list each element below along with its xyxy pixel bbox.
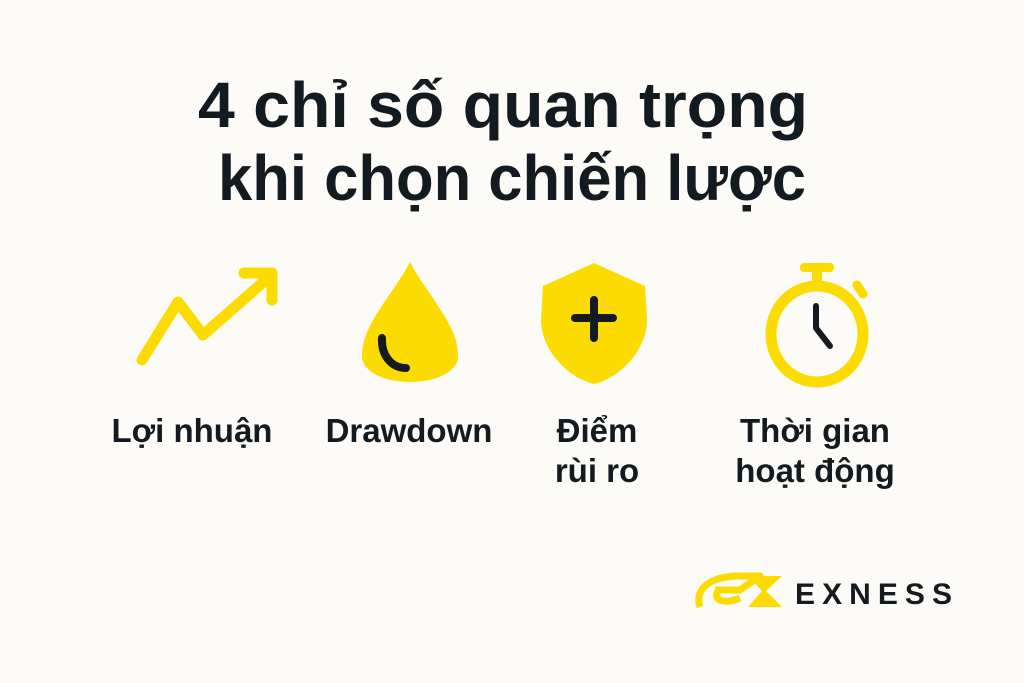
logo: exness <box>699 576 952 611</box>
icon: rising arrow <box>142 273 272 360</box>
icon: stopwatch <box>771 263 863 382</box>
labels: Drawdown <box>326 412 492 449</box>
labels <box>112 412 895 489</box>
logo: exness: EXNESS <box>795 578 952 611</box>
title <box>198 69 808 214</box>
labels: Lợi nhuận <box>112 412 272 449</box>
labels: hoạt động <box>735 452 895 489</box>
labels: rùi ro <box>555 452 639 489</box>
labels: Điểm <box>557 412 637 449</box>
icon: shield plus <box>541 263 647 384</box>
title: khi chọn chiến lược <box>218 142 806 214</box>
title: 4 chỉ số quan trọng <box>198 69 808 141</box>
icon: drop <box>362 262 458 382</box>
labels: Thời gian <box>740 412 890 449</box>
